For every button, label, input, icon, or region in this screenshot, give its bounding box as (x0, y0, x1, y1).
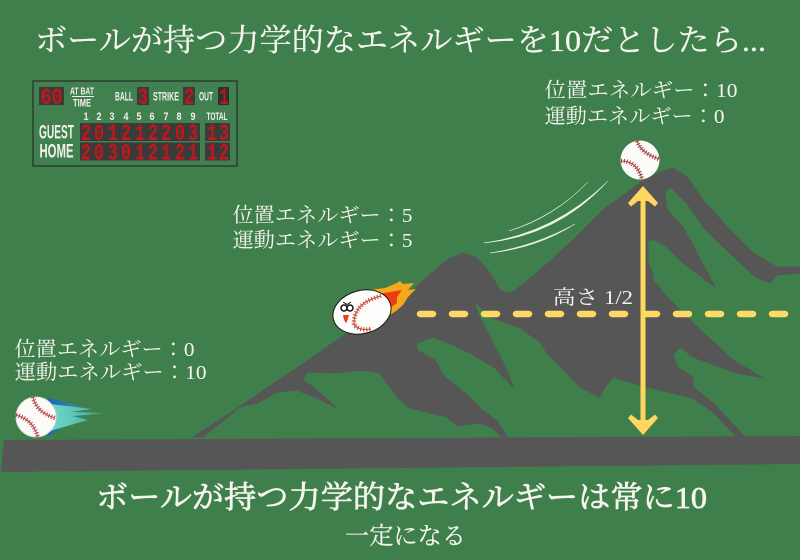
energy label: top: 運動エネルギー：0 (544, 105, 724, 128)
energy label: top (544, 79, 738, 128)
inning numbers (84, 111, 228, 123)
seam (354, 296, 381, 330)
inning numbers: 3 (110, 111, 114, 123)
ball strike out counts: 1 (220, 85, 228, 111)
score digits: 1 (188, 140, 198, 166)
team names: HOME (40, 142, 74, 162)
ball strike out counts: 3 (138, 85, 148, 111)
blue comet tail (48, 398, 110, 436)
at bat time label: TIME (73, 98, 91, 110)
energy label: middle: 運動エネルギー：5 (232, 229, 412, 252)
ball strike out counts: OUT (199, 92, 213, 104)
score digits: 3 (188, 121, 198, 147)
score digits: 2 (148, 121, 158, 147)
mountain (193, 168, 800, 437)
score digits: 3 (108, 140, 118, 166)
score digits: 0 (94, 140, 104, 166)
energy label: top: 位置エネルギー：10 (544, 79, 738, 102)
score digits: 1 (207, 140, 217, 166)
energy label: bottom left: 位置エネルギー：0 (14, 338, 194, 361)
team names: GUEST (39, 122, 74, 144)
at bat time label: AT BAT (70, 86, 94, 98)
ball strike out counts (115, 85, 229, 111)
at bat time label (70, 86, 94, 110)
score digits: 2 (81, 140, 91, 166)
flame (370, 281, 416, 315)
conclusion heading: ボールが持つ力学的なエネルギーは常に10 (96, 480, 707, 515)
ground (1, 436, 800, 472)
score digits: 2 (148, 140, 158, 166)
energy label: bottom left (14, 338, 206, 384)
score digits: 0 (121, 140, 131, 166)
score digits: 1 (161, 140, 171, 166)
score digits: 2 (121, 121, 131, 147)
inning numbers: 4 (124, 111, 129, 123)
flaming ball with face (328, 281, 416, 340)
inning numbers: 6 (150, 111, 154, 123)
score digits: 3 (219, 121, 229, 147)
score digits: 1 (135, 121, 145, 147)
ball strike out counts: BALL (115, 92, 133, 104)
inning numbers: 9 (190, 111, 196, 123)
face (341, 302, 353, 323)
ball at left (16, 397, 56, 438)
score digits: 1 (135, 140, 145, 166)
inning numbers: 7 (164, 111, 168, 123)
inning numbers: 5 (136, 111, 142, 123)
score digits: 2 (219, 140, 229, 166)
ball strike out counts: 2 (184, 85, 194, 111)
energy label: middle: 位置エネルギー：5 (232, 204, 412, 227)
score digits: 2 (161, 121, 171, 147)
energy label: bottom left: 運動エネルギー：10 (14, 361, 206, 384)
speed lines (484, 181, 608, 253)
team names (39, 122, 74, 162)
dashed half-height line (420, 311, 790, 317)
inning numbers: 8 (176, 111, 182, 123)
inning numbers: 1 (84, 111, 88, 123)
time digits: 60 (40, 85, 62, 111)
scoreboard (33, 81, 237, 166)
score digits: 0 (175, 121, 185, 147)
energy label: middle (232, 204, 412, 252)
score digits: 1 (207, 121, 217, 147)
score digits: 0 (94, 121, 104, 147)
inning numbers: 2 (96, 111, 102, 123)
score digits: 1 (108, 121, 118, 147)
ball strike out counts: STRIKE (153, 92, 179, 104)
ball at top (620, 140, 660, 180)
score digits: 2 (81, 121, 91, 147)
height label: 高さ 1/2 (553, 286, 633, 309)
inning numbers: TOTAL (206, 111, 228, 123)
score digits (80, 121, 230, 166)
title: ボールが持つ力学的なエネルギーを10だとしたら... (35, 23, 766, 58)
score digits: 2 (175, 140, 185, 166)
ball body (328, 284, 396, 340)
conclusion subtext: 一定になる (345, 523, 466, 550)
double-headed height arrow (628, 186, 658, 435)
